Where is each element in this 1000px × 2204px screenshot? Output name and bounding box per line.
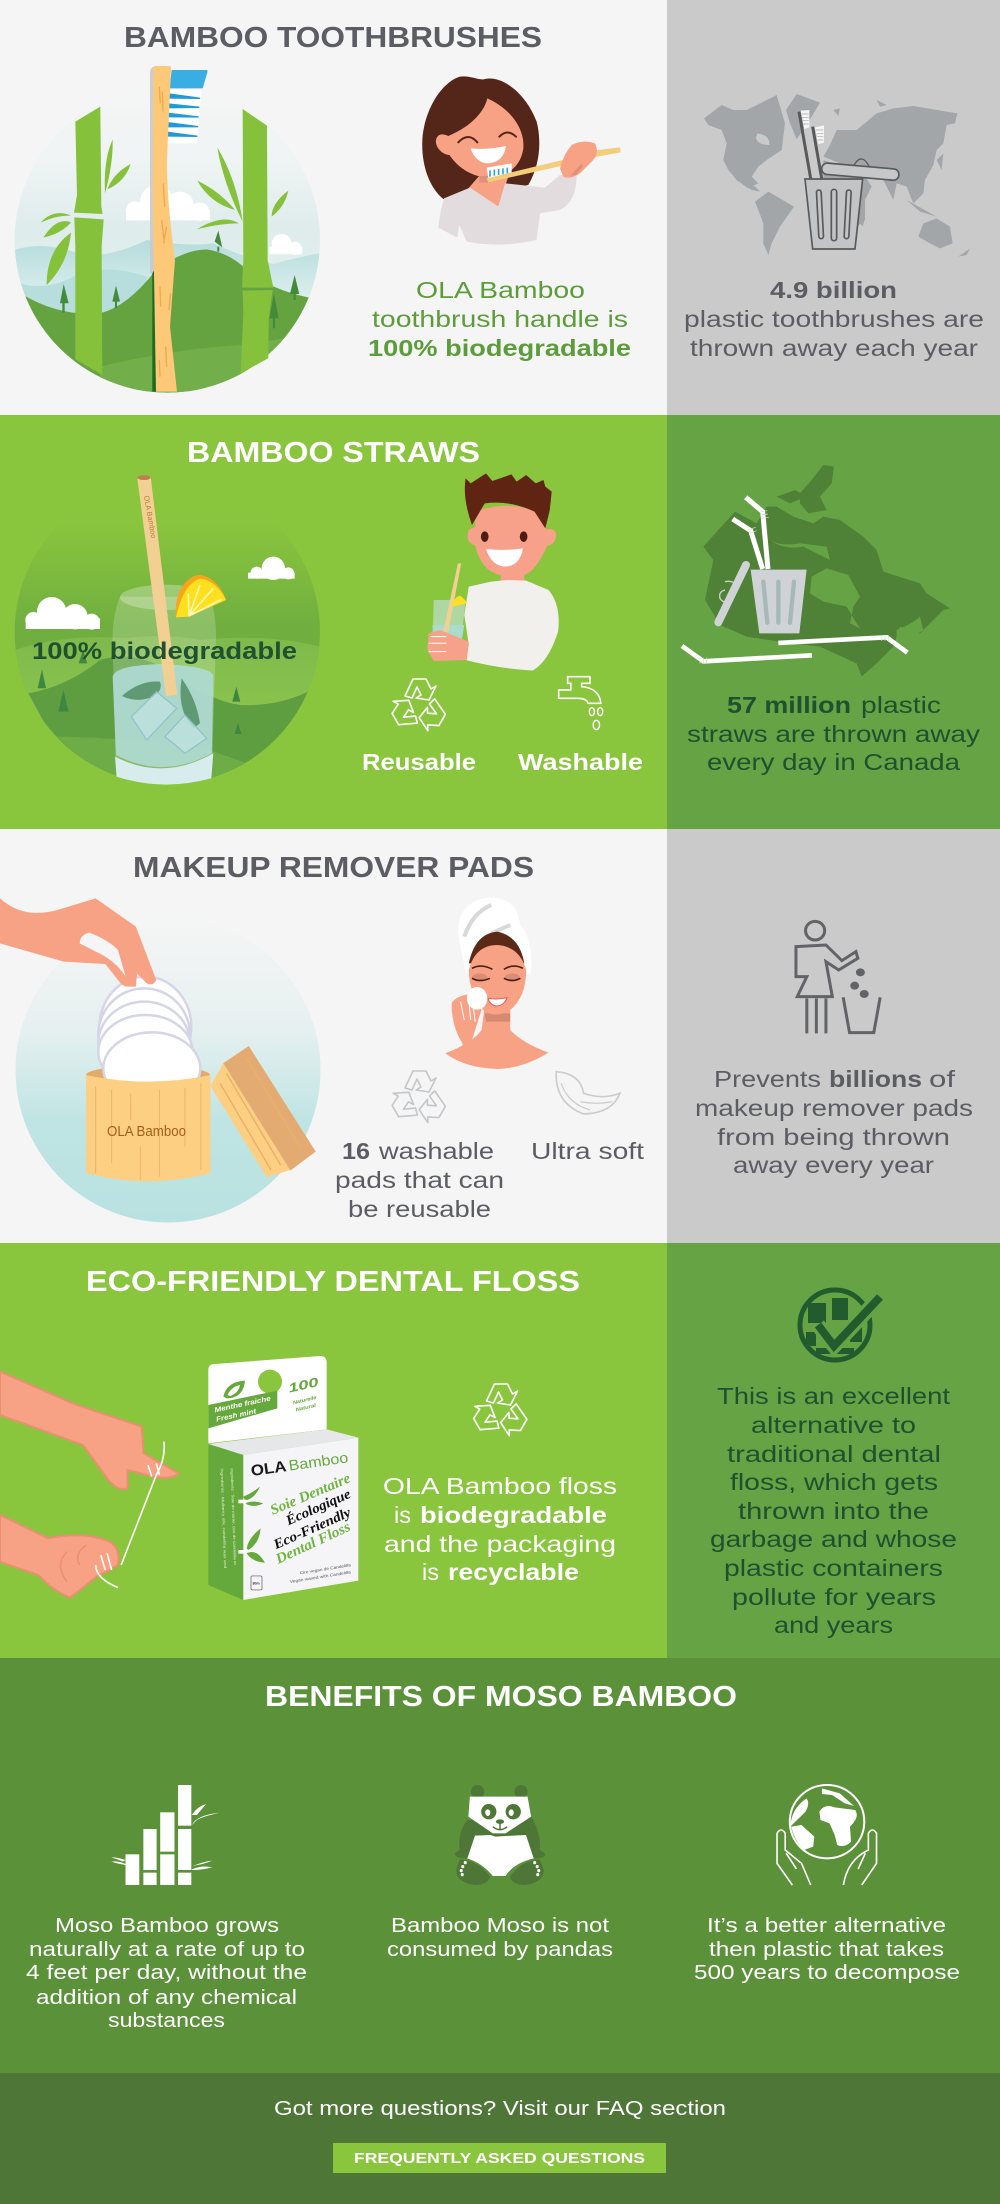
- button: frequently asked questions: [333, 2143, 666, 2173]
- text: prevents billions: from being thrown: [717, 1124, 950, 1150]
- trash can: [718, 565, 807, 633]
- heading: eco-friendly dental floss: ECO-FRIENDLY DENTAL FLOSS: [86, 1266, 580, 1298]
- illustration: world map with trash can and toothbrushes: [704, 94, 970, 257]
- text: 57 million straws: every day in Canada: [707, 749, 961, 775]
- mint and ice cubes: [122, 678, 207, 753]
- panel: bamboo straws: [13, 437, 980, 790]
- illustration: man with drink: [427, 473, 559, 671]
- text: biodegradable handle: 100% biodegradable: [368, 335, 631, 361]
- world map: [704, 94, 970, 257]
- label: washable: Washable: [518, 749, 643, 775]
- text: moso grows: substances: [108, 2009, 225, 2032]
- illustration: dental floss box: 100: [287, 1375, 320, 1396]
- heading: makeup remover pads: MAKEUP REMOVER PADS: [133, 852, 534, 884]
- background: footer: [0, 2073, 1000, 2204]
- text: alternative to traditional floss: pollute for years: [732, 1584, 936, 1610]
- text: moso grows: addition of any chemical: [36, 1986, 297, 2009]
- panel: benefits of moso bamboo: [26, 1681, 960, 2032]
- text: prevents billions: of: [929, 1066, 956, 1092]
- heading: benefits of moso bamboo: BENEFITS OF MOSO BAMBOO: [265, 1681, 737, 1713]
- text: 4.9 billion toothbrushes: thrown away each year: [690, 335, 978, 361]
- text: biodegradable handle: [368, 277, 631, 361]
- illustration: dental floss box: Bamboo: [288, 1450, 349, 1475]
- label: reusable: Reusable: [362, 749, 476, 775]
- text: alternative to traditional floss: thrown into the: [738, 1498, 929, 1524]
- text: floss biodegradable and recyclable: biodegradable: [420, 1502, 607, 1528]
- text: not consumed by pandas: consumed by pandas: [387, 1938, 613, 1961]
- plastic straws: [682, 497, 907, 661]
- illustration: dental floss box: Ingrédients : Soie de mûrier, cire de candelilla et: [230, 1468, 237, 1565]
- illustration: woman with towel: [445, 897, 549, 1069]
- illustration: dental floss box: Écologique: [282, 1485, 353, 1529]
- text: 16 washable pads: pads that can: [335, 1167, 504, 1193]
- illustration: dental floss box: OLA: [250, 1458, 288, 1480]
- text: better alternative: [694, 1914, 960, 1984]
- panel: eco-friendly dental floss: [0, 1266, 957, 1638]
- text: moso grows: 4 feet per day, without the: [26, 1961, 307, 1984]
- text: floss biodegradable and recyclable: OLA Bamboo floss: [383, 1473, 617, 1499]
- text: 57 million straws: plastic: [861, 692, 941, 718]
- heading: bamboo toothbrushes: BAMBOO TOOTHBRUSHES: [124, 22, 542, 54]
- text: 57 million straws: straws are thrown away: [687, 721, 980, 747]
- text: alternative to traditional floss: This is an excellent: [717, 1383, 951, 1409]
- text: prevents billions: makeup remover pads: [695, 1095, 973, 1121]
- icon: feather: [556, 1072, 620, 1114]
- text: alternative to traditional floss: [710, 1383, 957, 1638]
- illustration: hand, pads and bamboo jar: [0, 898, 316, 1181]
- text: 16 washable pads: 16: [342, 1138, 370, 1164]
- panel: makeup remover pads: [0, 852, 973, 1222]
- text: not consumed by pandas: Bamboo Moso is not: [391, 1914, 609, 1937]
- button: frequently asked questions: FREQUENTLY ASKED QUESTIONS: [354, 2150, 645, 2167]
- straw: OLA Bamboo: [142, 495, 158, 539]
- illustration: dental floss box: [208, 1356, 358, 1600]
- background: section 4: [0, 1243, 1000, 1658]
- text: 4.9 billion toothbrushes: 4.9 billion: [770, 277, 897, 303]
- text: floss biodegradable and recyclable: recyclable: [448, 1559, 579, 1585]
- illustration: dental floss box: Naturelle: [292, 1395, 317, 1406]
- illustration: dental floss box: Natural: [295, 1403, 317, 1413]
- text: faq prompt: Got more questions? Visit our FAQ section: [274, 2097, 726, 2120]
- text: moso grows: naturally at a rate of up to: [29, 1938, 305, 1961]
- illustration: circle background: [16, 918, 320, 1222]
- text: alternative to traditional floss: plastic containers: [724, 1555, 943, 1581]
- illustration: dental floss box: Menthe fraiche: [214, 1395, 272, 1414]
- map of canada: [703, 465, 950, 677]
- text: moso grows: Moso Bamboo grows: [55, 1914, 279, 1937]
- text: better alternative: then plastic that takes: [709, 1938, 944, 1961]
- text: 4.9 billion toothbrushes: plastic toothbrushes are: [684, 306, 984, 332]
- trash can: [799, 112, 899, 249]
- text: floss biodegradable and recyclable: [383, 1473, 617, 1585]
- illustration: dental floss box: Eco-Friendly: [271, 1505, 354, 1553]
- toothbrush: [150, 66, 208, 392]
- text: 100% biodegradable: 100% biodegradable: [32, 638, 297, 665]
- background: section 1: [0, 0, 1000, 415]
- icon: bamboo stalks: [111, 1785, 220, 1885]
- text: prevents billions: Prevents: [714, 1066, 821, 1092]
- text: 4.9 billion toothbrushes: [684, 277, 984, 361]
- illustration: dental floss box: 30m: [252, 1581, 260, 1585]
- text: 57 million straws: 57 million: [727, 692, 851, 718]
- heading: bamboo straws: BAMBOO STRAWS: [187, 437, 480, 469]
- text: ultra soft: Ultra soft: [531, 1138, 645, 1164]
- icon: recycling: [469, 1384, 531, 1439]
- text: biodegradable handle: toothbrush handle is: [372, 306, 628, 332]
- panel: bamboo toothbrushes: [13, 22, 984, 393]
- icon: globe in hands: [777, 1785, 877, 1885]
- text: biodegradable handle: OLA Bamboo: [416, 277, 585, 303]
- straw: [137, 475, 177, 696]
- icon: panda: [455, 1785, 545, 1885]
- background: section 5: [0, 1658, 1000, 2073]
- illustration: bamboo and toothbrush scene: [13, 66, 323, 393]
- icon: recycling: [387, 1071, 449, 1126]
- pads: [98, 977, 200, 1104]
- background: section 3: [0, 829, 1000, 1243]
- icon: water tap: [559, 677, 603, 730]
- icon: person throwing trash: [796, 921, 880, 1033]
- text: prevents billions: [695, 1066, 973, 1178]
- jar: [86, 1046, 316, 1181]
- icon: recycling: [387, 679, 449, 734]
- illustration: woman brushing teeth: [422, 76, 621, 245]
- text: floss biodegradable and recyclable: is: [394, 1502, 411, 1528]
- illustration: dental floss box: Dental Floss: [272, 1519, 353, 1568]
- text: alternative to traditional floss: and years: [774, 1612, 893, 1638]
- text: 16 washable pads: washable: [378, 1138, 494, 1164]
- text: alternative to traditional floss: traditional dental: [727, 1441, 941, 1467]
- text: 16 washable pads: be reusable: [348, 1196, 491, 1222]
- text: alternative to traditional floss: floss, which gets: [730, 1469, 938, 1495]
- text: moso grows: [26, 1914, 307, 2032]
- text: not consumed by pandas: [387, 1914, 613, 1961]
- illustration: dental floss box: Cire vegan de Candelilla: [299, 1562, 352, 1575]
- panel: footer: [274, 2097, 726, 2173]
- text: prevents billions: away every year: [733, 1152, 934, 1178]
- text: prevents billions: billions: [829, 1066, 922, 1092]
- hand: [0, 898, 156, 987]
- icon: check mark badge: [800, 1290, 880, 1360]
- text: better alternative: It’s a better alternative: [707, 1914, 946, 1937]
- text: floss biodegradable and recyclable: and the packaging: [384, 1531, 616, 1557]
- background: section 2: [0, 415, 1000, 829]
- illustration: dental floss box: Soie Dentaire: [268, 1470, 354, 1519]
- lemon slice: [176, 575, 226, 617]
- text: alternative to traditional floss: alternative to: [751, 1412, 916, 1438]
- label: brand on jar: OLA Bamboo: [107, 1123, 186, 1140]
- text: floss biodegradable and recyclable: is: [422, 1559, 439, 1585]
- text: alternative to traditional floss: garbage and whose: [710, 1526, 957, 1552]
- illustration: glass with bamboo straw: [13, 475, 323, 790]
- illustration: dental floss box: Ingredients : Mulberry silk, candelilla wax and: [220, 1468, 227, 1568]
- illustration: dental floss box: Vegan waxed with Candelilla: [289, 1569, 352, 1584]
- illustration: dental floss box: Fresh mint: [216, 1408, 258, 1424]
- illustration: hands holding floss: [0, 1372, 179, 1598]
- text: better alternative: 500 years to decompose: [694, 1961, 960, 1984]
- illustration: canada map with straws and trash can: [682, 465, 950, 677]
- text: 16 washable pads: [335, 1138, 504, 1222]
- text: 57 million straws: [687, 692, 980, 775]
